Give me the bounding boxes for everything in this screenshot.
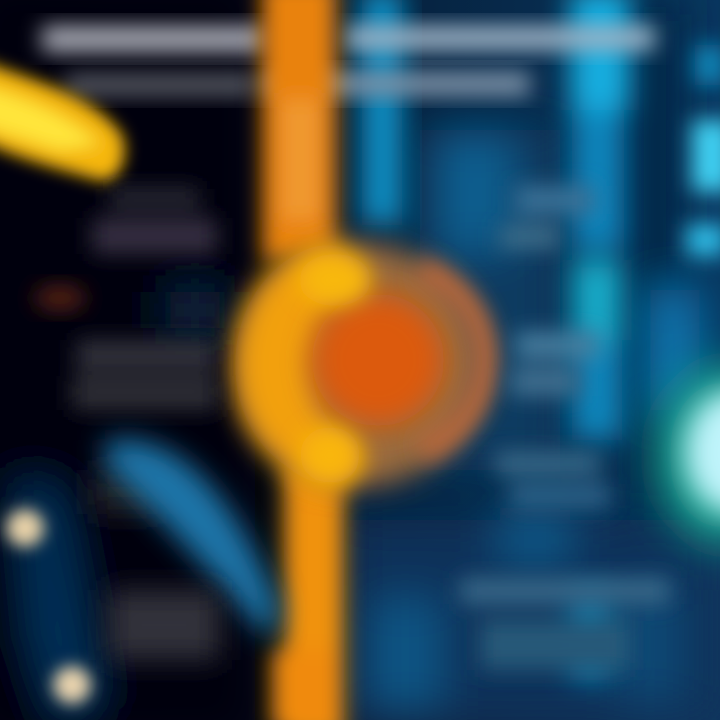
circle: central core [235, 243, 485, 487]
yellow lower highlight [300, 427, 360, 483]
title line one [42, 26, 267, 52]
orange vertical bar top [262, 0, 336, 260]
halo [236, 243, 480, 487]
icon: large glowing circle [655, 365, 720, 545]
icon: small red mark [34, 286, 86, 310]
title [42, 26, 655, 52]
orange ring right [420, 270, 485, 450]
panel: right blue side [350, 0, 720, 720]
text block: right four [460, 578, 670, 670]
text block: left four [108, 590, 220, 660]
column: cyan stripe centre [362, 0, 402, 225]
text block: left three [92, 470, 162, 514]
column: cyan stripe right [570, 0, 630, 680]
text block: right three [495, 452, 610, 508]
text block: right two [510, 332, 600, 396]
swoosh: blue diagonal [105, 439, 280, 640]
text block: left two [72, 340, 218, 410]
panel: left dark side [0, 0, 255, 720]
yellow highlight [299, 254, 371, 306]
icon: yellow banana shape [0, 60, 125, 182]
text block: right one [500, 186, 595, 248]
yellow left crescent [235, 244, 365, 484]
red core [312, 294, 444, 426]
icon: cream dot top [6, 509, 44, 547]
title line one, right segment [345, 26, 655, 50]
subtitle [65, 72, 530, 96]
icons: cyan blocks at right edge [686, 45, 720, 256]
orange vertical bar bottom [272, 460, 344, 720]
icon: cream dot bottom [53, 666, 91, 704]
text block: left one [92, 188, 217, 254]
